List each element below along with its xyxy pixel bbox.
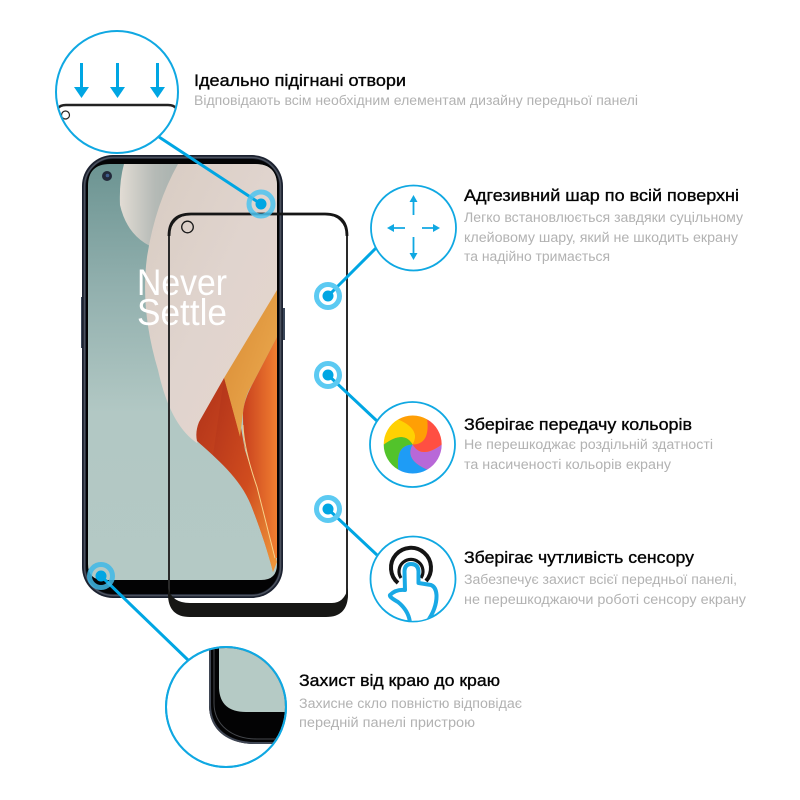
description: клейовому шару, який не шкодить екрану (464, 230, 739, 246)
glass bottom black border (168, 588, 348, 617)
wallpaper slogan (138, 270, 226, 326)
phone body (82, 155, 283, 598)
wallpaper grey petal (120, 164, 178, 246)
hotspot edge (90, 564, 112, 588)
description (464, 572, 747, 608)
arrows down (74, 63, 165, 98)
side buttons (81, 297, 285, 348)
text: colors (464, 416, 713, 473)
hole outline (62, 111, 70, 119)
callout circle: colors (370, 402, 455, 487)
heading: Адгезивний шар по всій поверхні (464, 187, 739, 205)
wallpaper lower red strip (224, 378, 274, 572)
description: Забезпечує захист всієї передньої панелі, (464, 572, 737, 588)
four-way arrows (387, 195, 440, 260)
heading: Зберігає передачу кольорів (464, 416, 692, 434)
hotspot adhesive (316, 284, 340, 308)
wallpaper slogan: Never (137, 262, 227, 303)
callout circle: touch (370, 536, 456, 623)
hotspot touch (316, 498, 340, 520)
text: adhesive (464, 187, 744, 265)
phone (81, 155, 285, 598)
description: Не перешкоджає роздільній здатності (464, 437, 713, 453)
hotspot colors (316, 364, 340, 386)
callout circle: adhesive (371, 186, 456, 270)
phone black bezel (86, 159, 279, 594)
zoomed phone corner (209, 648, 285, 744)
glass outline (169, 214, 347, 615)
wallpaper (88, 164, 277, 580)
description (464, 437, 713, 473)
glass edge curve (57, 105, 177, 110)
color wheel (384, 416, 442, 473)
wallpaper red fold (196, 378, 277, 572)
glass protector (168, 214, 348, 617)
phone camera (102, 171, 112, 181)
touch rings (391, 548, 431, 583)
glass top edge (169, 214, 347, 236)
heading: Захист від краю до краю (299, 672, 500, 690)
wallpaper slogan: Settle (137, 292, 227, 333)
heading: Зберігає чутливість сенсору (464, 549, 695, 567)
wallpaper gold fold (224, 290, 277, 437)
text: edge to edge (299, 672, 522, 731)
wallpaper background (88, 164, 277, 580)
callout circle: holes (56, 31, 178, 153)
zoomed screen (219, 648, 285, 712)
description: та насиченості кольорів екрану (464, 457, 672, 473)
description (299, 696, 522, 731)
description (464, 210, 744, 265)
phone metal frame (84, 158, 280, 596)
pointing finger (390, 564, 437, 623)
description: передній панелі пристрою (299, 715, 475, 731)
description: Легко встановлюється завдяки суцільному (464, 210, 744, 226)
wallpaper beige sheet (145, 164, 277, 443)
description: Відповідають всім необхідним елементам дизайну передньої панелі (194, 93, 638, 109)
zoomed frame highlight (214, 649, 276, 740)
text: holes (194, 72, 638, 109)
zoomed frame edge (209, 650, 274, 744)
callout circle: edge to edge (165, 646, 287, 768)
text: touch (464, 549, 747, 608)
zoom circle outline (166, 647, 286, 767)
glass camera hole (182, 221, 193, 233)
wallpaper highlight line (243, 425, 275, 558)
wallpaper orange fold (243, 337, 277, 558)
description: Захисне скло повністю відповідає (299, 696, 522, 712)
description: та надійно тримається (464, 249, 610, 265)
callout lines (101, 137, 377, 660)
description: не перешкоджаючи роботі сенсору екрану (464, 592, 747, 608)
hotspot top (249, 192, 273, 216)
heading: Ідеально підігнані отвори (194, 72, 406, 90)
